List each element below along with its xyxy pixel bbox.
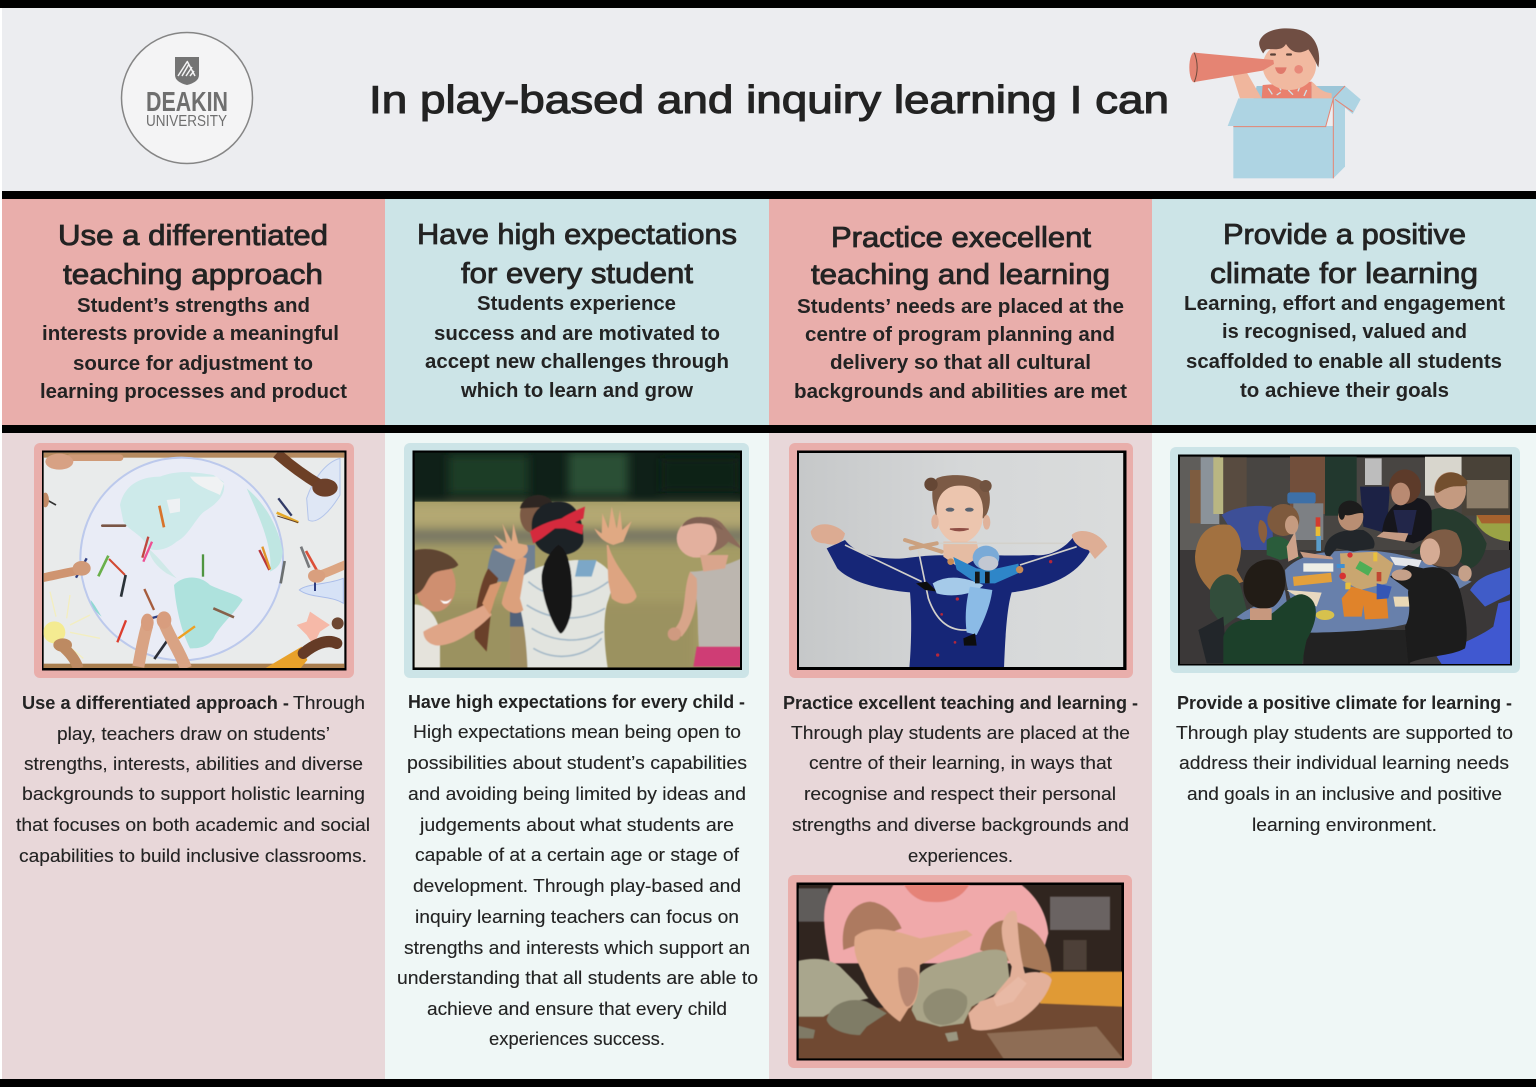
panel: excellent teaching heading bbox=[769, 199, 1152, 426]
photo: children playing high-five in a field bbox=[404, 443, 752, 678]
heading: Provide a positive bbox=[1223, 219, 1466, 251]
lower column backgrounds bbox=[0, 425, 1536, 1087]
logo: Deakin University: UNIVERSITY bbox=[146, 113, 227, 130]
body text: differentiated approach: strengths, interests, abilities and diverse bbox=[24, 754, 363, 774]
blocks bbox=[1316, 517, 1320, 527]
body text: excellent teaching and learning: centre of their learning, in ways that bbox=[809, 753, 1112, 773]
summary text: is recognised, valued and bbox=[1222, 321, 1467, 343]
body text: excellent teaching and learning: experiences. bbox=[908, 846, 1013, 866]
logo: Deakin University bbox=[122, 32, 252, 164]
panel: high expectations heading bbox=[385, 199, 769, 426]
photo: children with teacher at a table of blocks bbox=[1170, 447, 1520, 673]
heading: teaching and learning bbox=[811, 259, 1110, 291]
body text: differentiated approach: capabilities to build inclusive classrooms. bbox=[19, 846, 367, 866]
summary text: scaffolded to enable all students bbox=[1186, 351, 1502, 373]
body text: positive climate: Through play students are supported to bbox=[1176, 723, 1513, 743]
heading: Have high expectations bbox=[417, 219, 737, 251]
body text: high expectations: Have high expectations for every child - bbox=[408, 692, 745, 712]
curly girl left bbox=[1195, 524, 1243, 593]
summary text: success and are motivated to bbox=[434, 323, 720, 345]
summary text: delivery so that all cultural bbox=[830, 352, 1091, 374]
body text: high expectations: possibilities about student’s capabilities bbox=[407, 753, 747, 773]
body text: differentiated approach: backgrounds to support holistic learning bbox=[22, 784, 365, 804]
girl at right bbox=[678, 517, 743, 555]
panel: differentiated teaching approach heading bbox=[2, 199, 385, 426]
boy with cap centre bbox=[1324, 530, 1375, 558]
title: In play-based and inquiry learning I can bbox=[369, 79, 1169, 122]
orange basket bbox=[1342, 587, 1388, 619]
body text: positive climate: and goals in an inclusive and positive bbox=[1187, 784, 1502, 804]
summary text: accept new challenges through bbox=[425, 351, 729, 373]
heading: Use a differentiated bbox=[58, 220, 328, 252]
summary text bbox=[794, 296, 1127, 403]
boy in the background bbox=[520, 507, 540, 533]
photo: children colouring a world map bbox=[34, 443, 354, 678]
body text: differentiated approach: Through bbox=[293, 693, 365, 713]
body text: excellent teaching and learning: recognise and respect their personal bbox=[804, 784, 1116, 804]
summary text: backgrounds and abilities are met bbox=[794, 381, 1127, 403]
logo: Deakin University: DEAKIN bbox=[146, 86, 228, 117]
summary text bbox=[425, 293, 729, 402]
body text: high expectations bbox=[397, 692, 758, 1049]
body text: positive climate: Provide a positive climate for learning - bbox=[1177, 693, 1512, 713]
body text: excellent teaching and learning: Through play students are placed at the bbox=[791, 723, 1130, 743]
girl back with ponytail bbox=[1267, 537, 1300, 560]
summary text bbox=[1184, 293, 1505, 402]
heading bbox=[58, 220, 328, 291]
body text: high expectations: development. Through play-based and bbox=[413, 876, 741, 896]
heading: climate for learning bbox=[1210, 258, 1478, 290]
body text: differentiated approach: play, teachers draw on students’ bbox=[57, 724, 330, 744]
girl front right bbox=[1390, 565, 1467, 663]
body text: positive climate: learning environment. bbox=[1252, 815, 1437, 835]
summary text bbox=[40, 295, 347, 403]
summary text: centre of program planning and bbox=[805, 324, 1115, 346]
body text: high expectations: judgements about what students are bbox=[419, 815, 734, 835]
heading bbox=[417, 219, 737, 290]
body text: high expectations: understanding that all students are able to bbox=[397, 968, 758, 988]
body text: high expectations: strengths and interests which support an bbox=[404, 938, 750, 958]
body text: positive climate bbox=[1176, 693, 1513, 835]
heading bbox=[1210, 219, 1478, 290]
body text: high expectations: inquiry learning teachers can focus on bbox=[415, 907, 739, 927]
photo: child's hands kneading clay bbox=[788, 875, 1132, 1068]
heading: teaching approach bbox=[63, 259, 323, 291]
body text: differentiated approach: Use a differentiated approach - bbox=[22, 693, 289, 713]
body text: differentiated approach: that focuses on both academic and social bbox=[16, 815, 370, 835]
icon: Deakin shield bbox=[175, 57, 199, 85]
body text: excellent teaching and learning: strengths and diverse backgrounds and bbox=[792, 815, 1129, 835]
body text: excellent teaching and learning bbox=[783, 693, 1138, 866]
illustration: child in box with telescope bbox=[1189, 28, 1361, 178]
body text: differentiated approach bbox=[16, 693, 370, 866]
body text: positive climate: address their individual learning needs bbox=[1179, 753, 1509, 773]
boy right back bbox=[1410, 508, 1487, 568]
teacher bbox=[1382, 498, 1433, 543]
heading: for every student bbox=[461, 258, 693, 290]
summary text: source for adjustment to bbox=[73, 353, 313, 375]
summary text: to achieve their goals bbox=[1240, 380, 1449, 402]
boy front bbox=[1223, 594, 1316, 667]
panel: positive climate heading bbox=[1152, 199, 1536, 426]
body text: excellent teaching and learning: Practice excellent teaching and learning - bbox=[783, 693, 1138, 713]
heading bbox=[811, 222, 1110, 291]
photo: girl holding a marionette puppet bbox=[789, 443, 1133, 678]
summary text: Student’s strengths and bbox=[77, 295, 310, 317]
summary text: interests provide a meaningful bbox=[42, 323, 339, 345]
summary text: Students experience bbox=[477, 293, 676, 315]
body text: high expectations: achieve and ensure that every child bbox=[427, 999, 727, 1019]
worksheets bbox=[1293, 573, 1332, 586]
body text: high expectations: capable of at a certain age or stage of bbox=[415, 845, 740, 865]
body text: high expectations: and avoiding being limited by ideas and bbox=[408, 784, 746, 804]
heading: Practice execellent bbox=[831, 222, 1091, 254]
table bbox=[1285, 551, 1472, 633]
child at left bbox=[410, 604, 440, 672]
body text: high expectations: High expectations mean being open to bbox=[413, 722, 741, 742]
summary text: Learning, effort and engagement bbox=[1184, 293, 1505, 315]
header band bbox=[0, 0, 1536, 199]
body text: high expectations: experiences success. bbox=[489, 1029, 665, 1049]
summary text: Students’ needs are placed at the bbox=[797, 296, 1124, 318]
summary text: learning processes and product bbox=[40, 381, 347, 403]
summary text: which to learn and grow bbox=[460, 380, 693, 402]
girl with red bandana bbox=[514, 560, 613, 672]
